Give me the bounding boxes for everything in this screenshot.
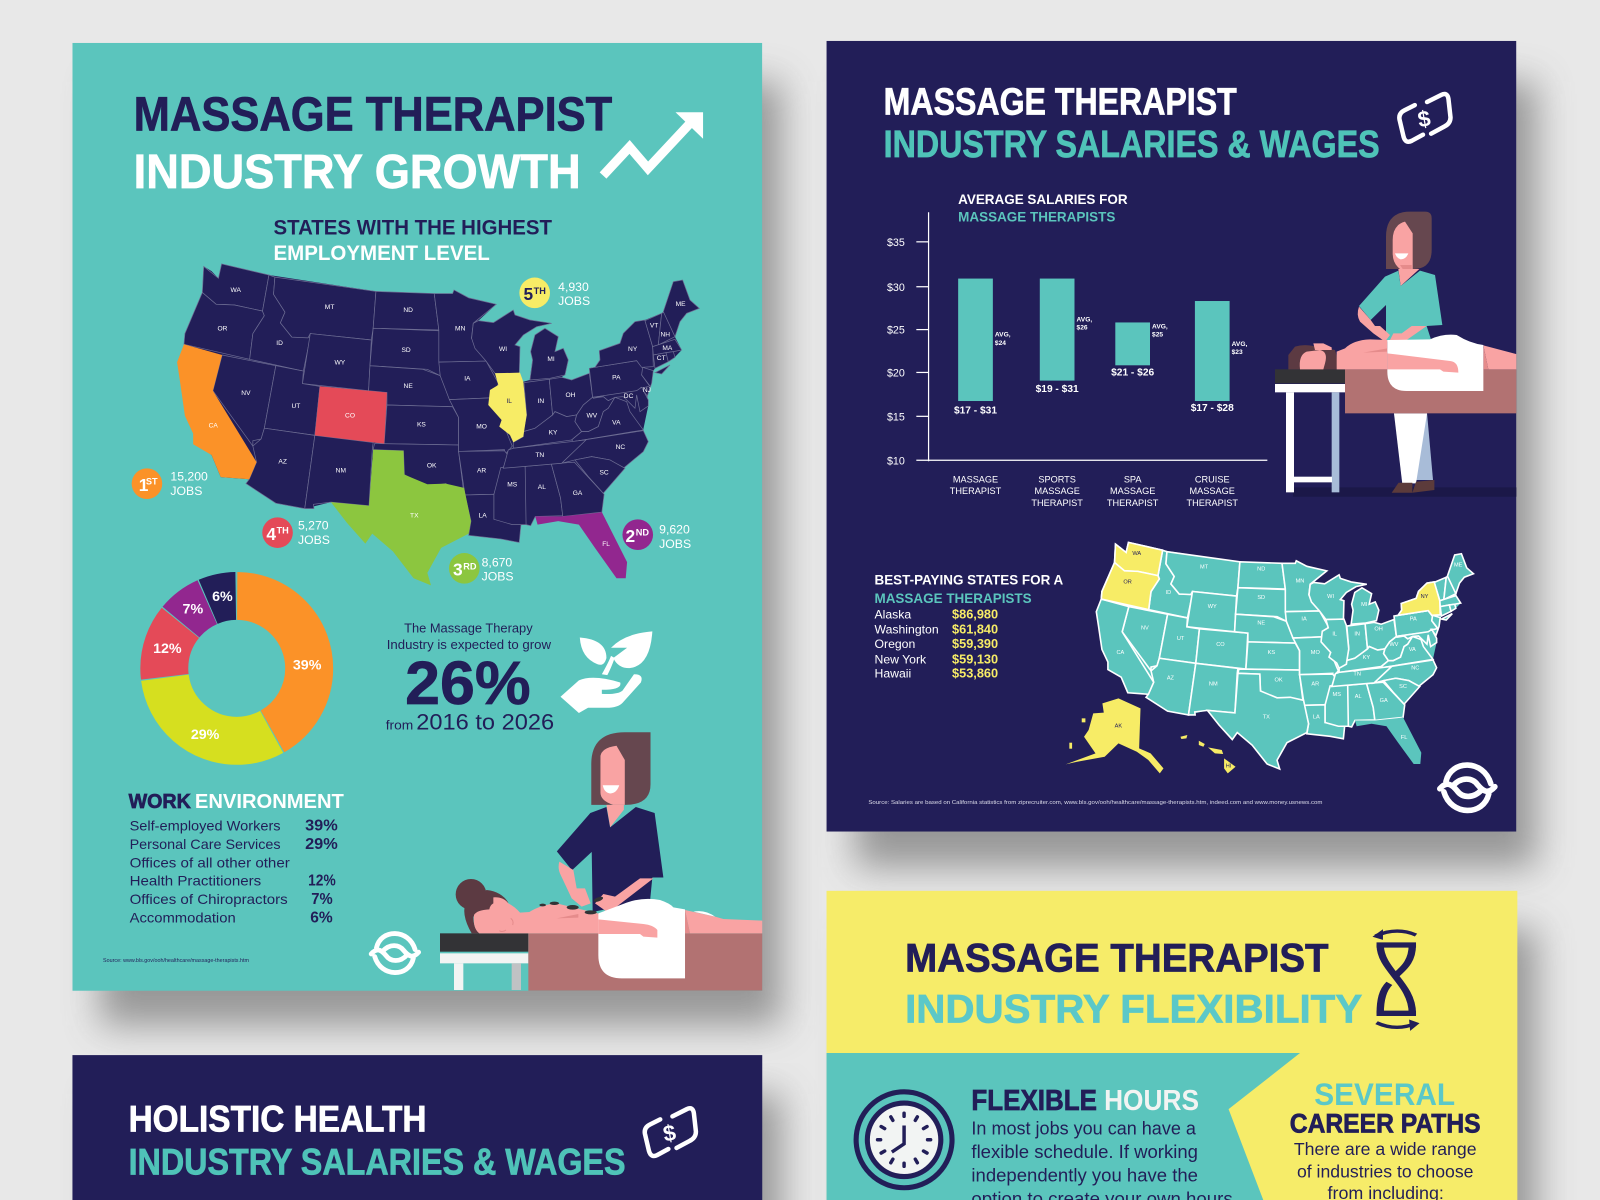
text block: work environment: 29% (305, 836, 338, 853)
title: industry growth (136, 96, 612, 189)
text block: best-paying states: BEST-PAYING STATES FOR A (874, 573, 1063, 589)
bar chart: average salaries: $24 (995, 340, 1006, 347)
illustration: therapist and client (1275, 212, 1522, 497)
map: best-paying states: MS (1333, 692, 1341, 698)
text block: 26% growth: The Massage Therapy (404, 621, 533, 636)
title: holistic health: INDUSTRY SALARIES & WAGES (129, 1141, 626, 1182)
map: best-paying states: AR (1311, 682, 1319, 688)
map: best-paying states (1066, 542, 1473, 773)
map: best-paying states: IN (1354, 632, 1360, 638)
callout: 2nd 9,620 jobs: JOBS (659, 537, 691, 551)
map: best-paying states: KY (1363, 655, 1370, 661)
map: employment by state: AL (538, 484, 546, 491)
heading: average salaries: MASSAGE THERAPISTS (958, 209, 1115, 225)
map: best-paying states: SC (1399, 684, 1407, 690)
map: best-paying states: CA (1117, 650, 1125, 656)
map: employment by state: IN (538, 398, 544, 405)
donut chart: work environment: 12% (153, 641, 182, 657)
map: best-paying states: OH (1374, 627, 1383, 633)
map: employment by state: KY (549, 430, 558, 437)
title: industry growth: MASSAGE THERAPIST (134, 89, 612, 142)
text block: best-paying states: $86,980 (952, 606, 998, 621)
icon: clock (856, 1092, 952, 1188)
text block: best-paying states: $59,390 (952, 636, 998, 651)
map: employment by state: MS (507, 482, 518, 489)
map: best-paying states: SD (1257, 595, 1265, 601)
callout: 1st 15,200 jobs: JOBS (170, 484, 202, 498)
map: employment by state: MO (476, 424, 487, 431)
callout: 5th 4,930 jobs (519, 278, 590, 308)
title: holistic health: HOLISTIC HEALTH (129, 1099, 427, 1140)
bar chart: average salaries: $25 (887, 325, 905, 337)
callout: 4th 5,270 jobs: TH (277, 526, 289, 536)
heading: states with the highest employment: EMPLOYMENT LEVEL (273, 241, 490, 265)
text block: 26% growth: from (386, 718, 413, 733)
map: employment by state: NE (404, 383, 413, 390)
text block: work environment: ENVIRONMENT (195, 791, 344, 813)
bar chart: average salaries: $10 (887, 455, 905, 467)
map: employment by state: ME (676, 301, 686, 308)
text block: several career paths: of industries to choose (1297, 1162, 1473, 1182)
callout: 1st 15,200 jobs: 15,200 (170, 470, 208, 484)
heading: states with the highest employment: STATES WITH THE HIGHEST (273, 216, 552, 240)
map: employment by state: OH (565, 392, 576, 399)
callout: 5th 4,930 jobs: TH (534, 286, 546, 296)
text block: work environment: Personal Care Services (130, 837, 281, 853)
map: employment by state: NC (616, 444, 625, 451)
donut chart: work environment: 7% (183, 601, 203, 617)
text block: work environment: Accommodation (130, 910, 236, 926)
map: best-paying states: KS (1268, 650, 1275, 656)
title: industry growth: INDUSTRY GROWTH (134, 146, 581, 199)
text block: best-paying states: MASSAGE THERAPISTS (874, 591, 1032, 607)
text block: best-paying states: $61,840 (952, 622, 998, 637)
map: best-paying states: PA (1410, 616, 1417, 622)
map: best-paying states: WY (1208, 604, 1217, 610)
text block: work environment: Health Practitioners (130, 874, 261, 890)
bar chart: average salaries: CRUISE (1195, 475, 1230, 485)
bar chart: average salaries: $15 (887, 411, 905, 423)
bar chart: average salaries: $17 - $31 (954, 405, 997, 416)
map: employment by state: NJ (643, 387, 651, 394)
map: best-paying states: AZ (1167, 676, 1175, 682)
map: best-paying states: WI (1327, 594, 1334, 600)
bar chart: average salaries: AVG, (1077, 316, 1092, 323)
text block: best-paying states: Hawaii (874, 667, 911, 681)
text block: flexible hours: In most jobs you can have a (971, 1118, 1197, 1139)
illustration: therapist and client with hot stones (440, 732, 763, 991)
map: employment by state: SC (599, 469, 609, 476)
callout: 4th 5,270 jobs: JOBS (298, 533, 330, 547)
map: best-paying states: AL (1355, 694, 1362, 700)
map: employment by state (177, 264, 699, 585)
title: industry flexibility: INDUSTRY FLEXIBILITY (905, 987, 1362, 1031)
map: employment by state: MT (325, 304, 334, 311)
callout: 2nd 9,620 jobs (622, 519, 691, 551)
map: employment by state: VT (650, 323, 658, 330)
text block: several career paths (1290, 1076, 1481, 1200)
bar chart: average salaries: $23 (1232, 349, 1243, 356)
bar chart: average salaries: THERAPIST (1187, 498, 1238, 508)
heading: states with the highest employment (274, 220, 552, 260)
map: employment by state: WI (499, 346, 507, 353)
map: employment by state: LA (479, 512, 487, 519)
bar chart: average salaries: AVG, (1232, 341, 1247, 348)
text block: work environment (129, 791, 344, 926)
panel: industry growth (72, 43, 763, 991)
map: employment by state: SD (402, 347, 411, 354)
callout: 3rd 8,670 jobs (449, 553, 514, 584)
map: employment by state: CT (657, 355, 666, 362)
map: best-paying states: OR (1123, 580, 1132, 586)
map: best-paying states: IL (1332, 632, 1337, 638)
text block: work environment: Self-employed Workers (130, 819, 281, 835)
map: best-paying states: HI (1226, 763, 1232, 769)
map: best-paying states: TX (1263, 714, 1270, 720)
map: employment by state: UT (291, 403, 300, 410)
text block: several career paths: SEVERAL (1314, 1076, 1455, 1112)
text block: best-paying states: New York (874, 652, 927, 666)
text block: 26% growth: Industry is expected to grow (387, 637, 552, 652)
text block: best-paying states: $59,130 (952, 651, 998, 666)
bar chart: average salaries: MASSAGE (1190, 486, 1235, 496)
text block: best-paying states: $53,860 (952, 666, 998, 681)
text block: 26% growth: 26% (405, 649, 531, 717)
map: best-paying states: OK (1275, 678, 1283, 684)
panel: industry flexibility (827, 891, 1517, 1200)
map: best-paying states: IA (1301, 616, 1307, 622)
callout: 4th 5,270 jobs (262, 517, 330, 548)
map: employment by state: WA (230, 287, 242, 294)
map: best-paying states: MT (1200, 564, 1209, 570)
bar chart: average salaries: $26 (1077, 325, 1088, 332)
map: employment by state: FL (602, 541, 610, 548)
map: best-paying states: NM (1209, 682, 1218, 688)
icon: growth arrow (603, 112, 703, 176)
map: best-paying states: ND (1257, 566, 1265, 572)
bar chart: average salaries: $21 - $26 (1111, 368, 1155, 379)
donut chart: work environment: 29% (191, 727, 220, 743)
map: employment by state: NY (628, 346, 638, 353)
callout: 1st 15,200 jobs: ST (146, 477, 158, 487)
map: employment by state: GA (573, 490, 583, 497)
bar chart: average salaries: SPORTS (1038, 475, 1076, 485)
map: employment by state: WY (334, 359, 346, 366)
map: best-paying states: WV (1389, 642, 1399, 648)
map: employment by state: DC (624, 393, 634, 400)
text block: best-paying states: Oregon (874, 637, 915, 651)
icon: dollar link: $ (1416, 106, 1433, 132)
map: employment by state: OK (427, 462, 437, 469)
text block: work environment: 7% (311, 891, 333, 908)
map: best-paying states: CO (1216, 642, 1225, 648)
source note: Source: Salaries are based on California statistics from ziprecruiter.com, www.bls.gov/ooh/healthcare/massage-therapists.htm, indeed.com and www.money.usnews.com (868, 800, 1323, 806)
text block: work environment: 12% (308, 873, 336, 890)
title: salaries and wages: INDUSTRY SALARIES & WAGES (884, 123, 1380, 165)
map: best-paying states: FL (1401, 735, 1407, 741)
title: salaries and wages: MASSAGE THERAPIST (884, 80, 1237, 122)
map: employment by state: OR (217, 326, 228, 333)
text block: flexible hours: FLEXIBLE (971, 1085, 1097, 1117)
text block: work environment: 39% (305, 818, 338, 835)
map: best-paying states: NY (1421, 594, 1429, 600)
callout: 4th 5,270 jobs: 4 (266, 524, 276, 544)
map: employment by state: ID (276, 340, 283, 347)
text block: flexible hours: independently you have the (971, 1165, 1198, 1186)
icon: dollar link: $ (661, 1120, 678, 1147)
callout: 5th 4,930 jobs: 4,930 (558, 280, 589, 294)
title: industry flexibility: MASSAGE THERAPIST (905, 936, 1329, 980)
title: salaries and wages (885, 88, 1379, 158)
map: best-paying states: LA (1313, 714, 1320, 720)
bar chart: average salaries: $17 - $28 (1191, 403, 1234, 414)
map: employment by state: IL (506, 398, 512, 405)
map: employment by state: TX (410, 512, 419, 519)
map: employment by state: ND (403, 307, 413, 314)
map: best-paying states: NC (1411, 665, 1419, 671)
map: employment by state: IA (464, 376, 471, 383)
map: best-paying states: VA (1409, 647, 1416, 653)
panel: holistic health (72, 1055, 762, 1200)
callout: 1st 15,200 jobs: 1 (139, 475, 149, 495)
map: best-paying states: MO (1311, 650, 1320, 656)
bar chart: average salaries: $20 (887, 368, 905, 380)
map: employment by state: CO (345, 412, 355, 419)
map: employment by state: MI (547, 356, 555, 363)
icon: logo (1440, 765, 1495, 810)
callout: 3rd 8,670 jobs: 8,670 (482, 555, 512, 569)
callout: 3rd 8,670 jobs: 3 (453, 560, 463, 580)
bar chart: average salaries: THERAPIST (1107, 498, 1159, 508)
map: employment by state: CA (209, 423, 218, 430)
panel: salaries and wages (827, 41, 1522, 832)
callout: 1st 15,200 jobs (132, 468, 208, 499)
callout: 5th 4,930 jobs: 5 (523, 284, 533, 304)
callout: 3rd 8,670 jobs: RD (463, 561, 477, 571)
map: best-paying states: ME (1454, 562, 1463, 568)
callout: 5th 4,930 jobs: JOBS (558, 294, 590, 308)
bar chart: average salaries: MASSAGE (1034, 486, 1080, 496)
heading: average salaries (958, 194, 1128, 222)
map: best-paying states: ID (1166, 590, 1171, 596)
donut chart: work environment: 39% (293, 657, 322, 673)
callout: 3rd 8,670 jobs: JOBS (482, 570, 514, 584)
callout: 4th 5,270 jobs: 5,270 (298, 519, 329, 533)
callout: 2nd 9,620 jobs: 9,620 (659, 523, 690, 537)
text block: work environment: WORK (129, 791, 191, 813)
teal banner (827, 1053, 1300, 1200)
callout: 2nd 9,620 jobs: 2 (626, 526, 635, 546)
bar chart: average salaries: AVG, (995, 332, 1011, 339)
bar chart: average salaries: SPA (1124, 475, 1142, 485)
heading: average salaries: AVERAGE SALARIES FOR (958, 192, 1128, 208)
icon: dollar link (645, 1108, 696, 1156)
map: employment by state: MN (455, 326, 466, 333)
text block: 26% growth: 2016 to 2026 (416, 710, 554, 735)
map: best-paying states: MI (1361, 602, 1368, 608)
map: employment by state: WV (587, 412, 598, 419)
text block: several career paths: There are a wide range (1294, 1139, 1477, 1159)
callout: 2nd 9,620 jobs: ND (636, 528, 649, 538)
text block: work environment: Offices of Chiropractors (130, 892, 288, 908)
bar chart: average salaries: MASSAGE (953, 475, 998, 485)
bar chart: average salaries (887, 212, 1267, 508)
text block: flexible hours: HOURS (1104, 1085, 1199, 1117)
bar chart: average salaries: THERAPIST (950, 486, 1002, 496)
icon: hourglass (1373, 930, 1419, 1030)
map: best-paying states: NV (1141, 626, 1149, 632)
map: employment by state: NH (661, 332, 670, 339)
map: best-paying states: WA (1132, 551, 1141, 557)
bar chart: average salaries: $19 - $31 (1036, 384, 1079, 395)
map: best-paying states: NE (1257, 620, 1265, 626)
text block: best-paying states: Washington (874, 623, 939, 637)
icon: dollar link (1399, 94, 1451, 142)
text block: work environment: Offices of all other other (130, 855, 290, 871)
bar chart: average salaries: MASSAGE (1110, 486, 1155, 496)
map: employment by state: MA (662, 345, 673, 352)
title: industry flexibility (905, 936, 1362, 1031)
map: best-paying states: GA (1380, 698, 1388, 704)
donut chart: work environment (153, 589, 322, 743)
bar chart: average salaries: THERAPIST (1031, 498, 1083, 508)
bar chart: average salaries: $30 (887, 282, 905, 294)
title: holistic health (129, 1099, 626, 1182)
map: employment by state: NM (336, 467, 346, 474)
source note: Source: www.bls.gov/ooh/healthcare/massage-therapists.htm (103, 958, 249, 964)
map: employment by state: VA (612, 419, 621, 426)
map: employment by state: PA (612, 375, 621, 382)
map: employment by state: KS (417, 422, 426, 429)
text block: several career paths: CAREER PATHS (1290, 1109, 1481, 1139)
map: employment by state: NV (241, 390, 251, 397)
text block: 26% growth (386, 621, 554, 735)
text block: flexible hours (971, 1085, 1233, 1200)
text block: flexible hours: flexible schedule. If working (971, 1141, 1198, 1162)
text block: best-paying states (874, 573, 1063, 681)
map: employment by state: AZ (278, 458, 287, 465)
bar chart: average salaries: AVG, (1152, 324, 1168, 331)
text block: best-paying states: Alaska (874, 607, 911, 621)
icon: plant in hand (561, 631, 652, 713)
map: employment by state: TN (535, 452, 544, 459)
bar chart: average salaries: $25 (1152, 332, 1163, 339)
text block: work environment: 6% (310, 909, 333, 926)
map: best-paying states: AK (1115, 724, 1122, 730)
map: best-paying states: UT (1177, 636, 1185, 642)
map: best-paying states: MN (1296, 579, 1304, 585)
icon: logo (371, 934, 419, 973)
bar chart: average salaries: $35 (887, 237, 905, 249)
donut chart: work environment: 6% (212, 589, 233, 605)
map: best-paying states: TN (1353, 672, 1361, 678)
map: employment by state: AR (477, 467, 486, 474)
